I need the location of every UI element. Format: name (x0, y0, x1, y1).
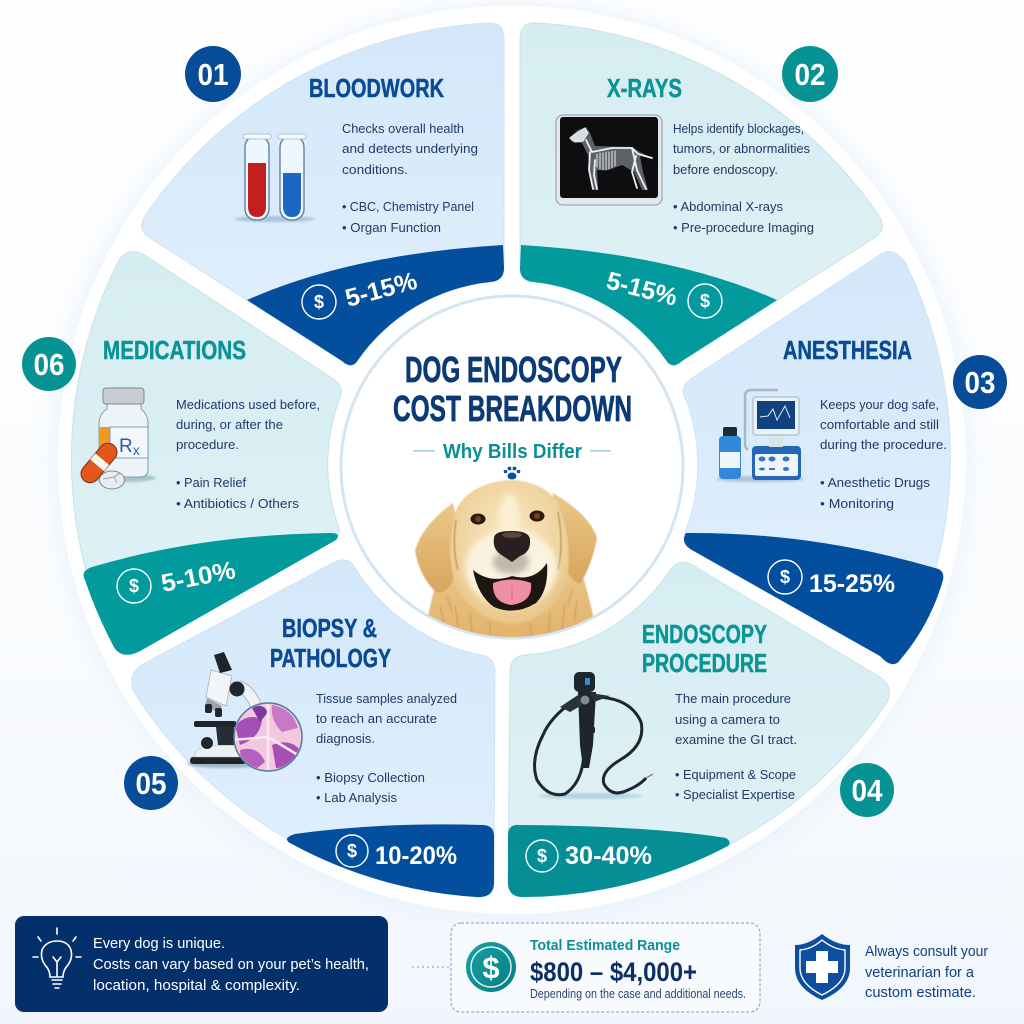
description (176, 397, 320, 511)
description (675, 691, 797, 802)
price: 15-25%: 15-25% (809, 570, 895, 598)
price: 30-40% (526, 840, 652, 872)
description: • Anesthetic Drugs (820, 475, 931, 490)
title: COST BREAKDOWN (393, 388, 632, 429)
description: Tissue samples analyzed (316, 691, 457, 706)
panel: medications (71, 252, 341, 655)
callout text: Costs can vary based on your pet’s health, (93, 956, 369, 973)
description: diagnosis. (316, 731, 375, 746)
description: • Biopsy Collection (316, 770, 425, 785)
description: before endoscopy. (673, 162, 778, 177)
heading: MEDICATIONS (103, 335, 246, 365)
price: 5-15%: 5-15% (342, 267, 420, 313)
subtitle: Why Bills Differ (443, 441, 582, 463)
panel: total estimated range (451, 923, 760, 1012)
price: 5-15%: $ (700, 291, 710, 311)
panel: total estimated range: $800 – $4,000+ (530, 957, 697, 987)
text block: consult veterinarian: custom estimate. (865, 984, 976, 1001)
description: using a camera to (675, 712, 780, 727)
icon: paw (504, 467, 520, 480)
icon: dollar coin: $ (482, 950, 500, 985)
title: DOG ENDOSCOPY (405, 349, 622, 390)
badge 04 (840, 763, 894, 817)
icon: light bulb (33, 928, 81, 988)
text block: consult veterinarian: Always consult your (865, 943, 988, 960)
heading: PATHOLOGY (270, 643, 391, 673)
panel: endoscopy procedure (508, 562, 889, 897)
price: 10-20% (336, 835, 457, 870)
badge 02: 02 (794, 57, 826, 92)
description: • CBC, Chemistry Panel (342, 199, 474, 214)
icon: pill bottle (77, 388, 156, 489)
panel: total estimated range: Total Estimated Range (530, 937, 680, 954)
panel: bloodwork (142, 23, 504, 365)
heading (270, 613, 391, 673)
description: Checks overall health (342, 121, 464, 136)
price: 10-20%: 10-20% (375, 842, 457, 870)
price: 10-20%: $ (347, 841, 357, 861)
description (342, 121, 478, 235)
price band: endoscopy (508, 825, 730, 897)
price band: bloodwork (247, 245, 504, 365)
description: conditions. (342, 162, 408, 177)
icon: endoscope (535, 672, 653, 799)
callout: every dog is unique (15, 916, 388, 1012)
callout text: Every dog is unique. (93, 935, 225, 952)
price: 5-15%: $ (314, 292, 324, 312)
price band: x-rays (520, 245, 777, 365)
icon: test tubes (235, 134, 315, 222)
illustration: golden retriever (414, 479, 598, 637)
callout text: location, hospital & complexity. (93, 977, 300, 994)
panel: biopsy and pathology (132, 560, 495, 897)
description (673, 121, 814, 235)
badge 06 (22, 337, 76, 391)
price: 30-40%: $ (537, 846, 547, 866)
heading: X-RAYS (607, 73, 682, 103)
text block: consult veterinarian (865, 943, 988, 1001)
badge 04: 04 (852, 773, 883, 808)
description: The main procedure (675, 691, 791, 706)
icon: anesthesia machine (716, 390, 804, 482)
heading (642, 619, 767, 678)
panel: center circle (341, 296, 683, 660)
text block: consult veterinarian: veterinarian for a (865, 964, 975, 981)
description: • Specialist Expertise (675, 787, 795, 802)
heading: ENDOSCOPY (642, 619, 767, 649)
icon: pill bottle: R (119, 436, 133, 457)
price: 5-15% (604, 267, 722, 318)
description: • Antibiotics / Others (176, 496, 300, 511)
icon: microscope with tissue sample (187, 652, 302, 772)
title (393, 349, 632, 429)
heading: BLOODWORK (309, 73, 444, 103)
price band: biopsy (287, 824, 494, 897)
price: 30-40%: 30-40% (565, 842, 652, 870)
white outer ring (58, 6, 966, 914)
panel: total estimated range: Depending on the case and additional needs. (530, 986, 746, 1001)
icon: shield (795, 934, 850, 1000)
description: Helps identify blockages, (673, 121, 804, 136)
icon: x-ray monitor (556, 115, 662, 205)
price: 5-15% (302, 267, 420, 319)
description: • Monitoring (820, 496, 894, 511)
price band: anesthesia (684, 533, 943, 664)
description: examine the GI tract. (675, 732, 797, 747)
badge 06: 06 (34, 347, 64, 382)
heading: PROCEDURE (642, 648, 767, 678)
dog nose (494, 531, 530, 562)
badge 03 (953, 355, 1007, 409)
description: during the procedure. (820, 437, 947, 452)
heading: ANESTHESIA (783, 335, 912, 365)
description: • Pain Relief (176, 475, 246, 490)
dog eyes (470, 510, 544, 524)
badge 05 (124, 756, 178, 810)
badge 01 (185, 46, 241, 102)
description (316, 691, 457, 805)
price: 5-10%: 5-10% (159, 556, 238, 598)
panel: anesthesia (683, 252, 950, 664)
connector: dotted line (412, 966, 451, 968)
description: and detects underlying (342, 141, 478, 156)
price: 5-10%: $ (129, 576, 139, 596)
badge 05: 05 (136, 766, 166, 801)
description: tumors, or abnormalities (673, 141, 810, 156)
price band: medications (84, 533, 338, 655)
icon: pill bottle: x (133, 442, 140, 458)
price: 5-15%: 5-15% (604, 267, 680, 312)
description: to reach an accurate (316, 711, 437, 726)
description: • Organ Function (342, 220, 441, 235)
description: procedure. (176, 437, 239, 452)
description: during, or after the (176, 417, 283, 432)
description: • Abdominal X-rays (673, 199, 783, 214)
badge 02 (782, 46, 838, 102)
description: • Equipment & Scope (675, 767, 796, 782)
description: comfortable and still (820, 417, 939, 432)
price: 5-10% (117, 556, 238, 603)
icon: dollar coin (466, 942, 516, 992)
price: 15-25%: $ (780, 567, 790, 587)
description: • Pre-procedure Imaging (673, 220, 814, 235)
description: Keeps your dog safe, (820, 397, 939, 412)
description (820, 397, 947, 511)
badge 01: 01 (198, 57, 228, 92)
badge 03: 03 (964, 365, 996, 400)
callout text (93, 935, 369, 994)
dog mouth and tongue (473, 563, 547, 611)
price: 15-25% (768, 560, 895, 598)
heading: BIOPSY & (282, 613, 377, 643)
description: Medications used before, (176, 397, 320, 412)
description: • Lab Analysis (316, 790, 397, 805)
panel: x-rays (520, 23, 882, 365)
